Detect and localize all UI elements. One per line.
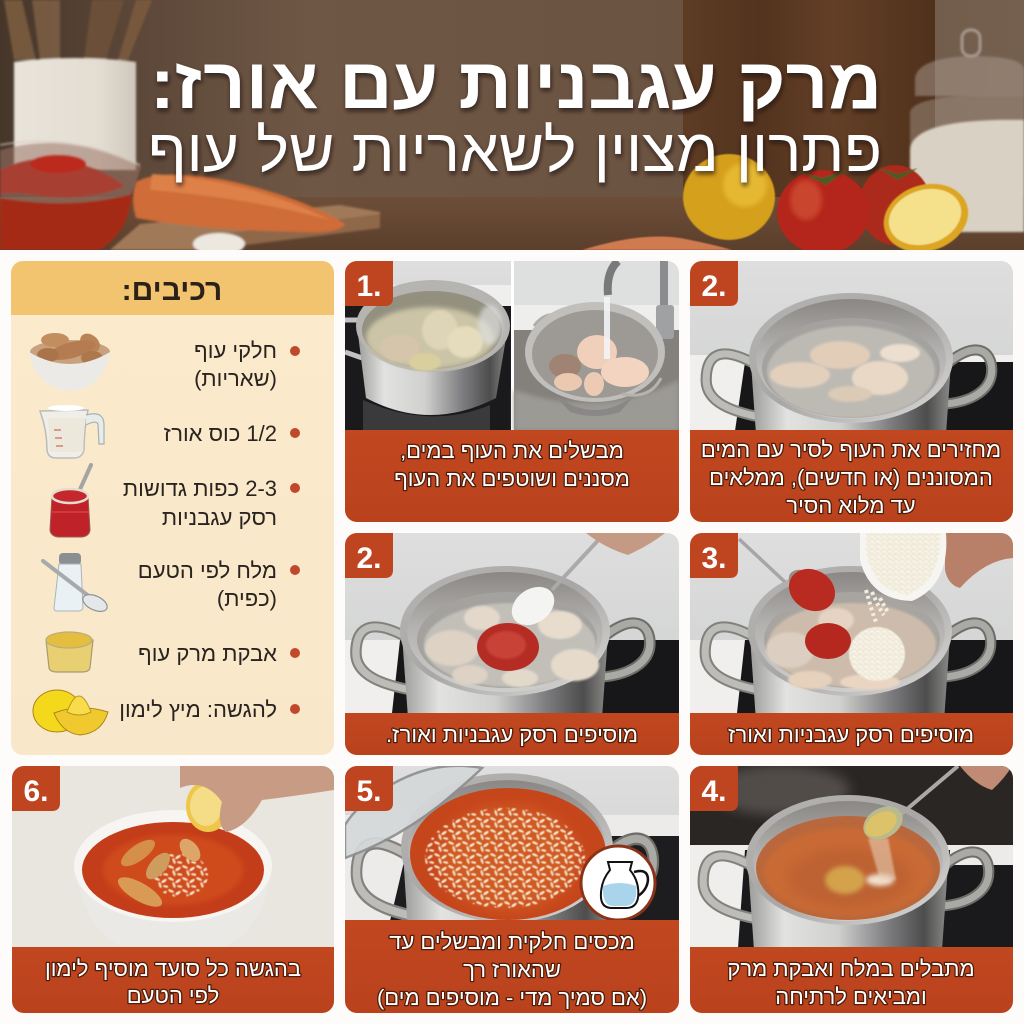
photo: colander in sink	[514, 261, 679, 431]
panel: step 4 season and boil	[690, 765, 1013, 1013]
crock with wooden spoons	[4, 0, 152, 170]
caption	[690, 947, 1013, 1013]
caption: מתבלים במלח ואבקת מרק	[727, 956, 975, 981]
text: rice	[164, 425, 300, 441]
badge: 5	[345, 766, 393, 811]
caption: מוסיפים רסק עגבניות ואורז	[728, 722, 974, 747]
icon: lemon and juicer	[33, 690, 108, 735]
caption: מבשלים את העוף במים,	[400, 438, 624, 463]
ingredients header	[11, 261, 334, 315]
lemon and tomatoes	[582, 153, 969, 250]
panel: step 1 boil and strain	[345, 261, 679, 522]
panel: step 3 add paste and rice	[690, 533, 1013, 755]
photo: pot on hob	[345, 261, 511, 431]
icon: salt shaker and spoon	[43, 553, 110, 615]
caption	[690, 430, 1013, 522]
title line 1: מרק עגבניות עם אורז:	[150, 44, 882, 124]
photo: pot with rice soup and lid	[345, 766, 679, 1020]
badge: 3	[690, 533, 738, 578]
carrots and cutting board	[110, 174, 380, 255]
photo: pot with paste and spoon	[345, 533, 679, 713]
photo: pot with chicken	[690, 261, 1013, 430]
badge: 4: 4.	[701, 775, 727, 808]
badge: 4	[690, 766, 738, 811]
caption: לפי הטעם	[127, 983, 219, 1008]
text: tomato paste: רסק עגבניות	[162, 505, 277, 530]
caption: בהגשה כל סועד מוסיף לימון	[45, 956, 301, 981]
badge: 6: 6.	[23, 775, 49, 808]
icon: chicken bowl	[29, 330, 110, 391]
icon: measuring cup of rice	[40, 405, 104, 458]
text: salt: מלח לפי הטעם	[138, 558, 277, 583]
caption: שהאורז רך	[463, 957, 561, 982]
caption	[345, 430, 679, 522]
panel: step 5 cover and cook	[345, 766, 679, 1020]
badge: 5: 5.	[356, 775, 382, 808]
glass jar of rice	[910, 30, 1024, 232]
caption: מחזירים את העוף לסיר עם המים	[701, 437, 1001, 462]
icon: chicken stock powder	[46, 632, 93, 672]
panel: step 2 return chicken to pot	[690, 261, 1013, 522]
badge: 1: 1.	[356, 270, 382, 303]
header photo banner	[0, 0, 1024, 263]
ingredients heading: רכיבים:	[122, 274, 222, 307]
caption	[690, 713, 1013, 755]
text: tomato paste	[124, 480, 300, 529]
text: chicken parts: חלקי עוף	[194, 338, 277, 363]
panel: ingredients	[11, 261, 334, 755]
panel: step add tomato paste	[345, 533, 679, 755]
badge: 6	[12, 766, 60, 811]
text: salt	[138, 558, 300, 611]
badge: 2: 2.	[356, 542, 382, 575]
panel: step 6 serve	[12, 766, 334, 1013]
badge: 2	[690, 261, 738, 306]
text: tomato paste: 2-3 כפות גדושות	[123, 476, 277, 501]
photo: boiling pot with spoon	[690, 765, 1013, 1010]
caption: מסננים ושוטפים את העוף	[394, 466, 630, 491]
text: lemon: להגשה: מיץ לימון	[119, 697, 277, 722]
text: rice: 1/2 כוס אורז	[164, 421, 277, 446]
caption: מוסיפים רסק עגבניות ואורז.	[386, 722, 638, 747]
text: chicken parts	[194, 338, 300, 391]
caption: עד מלוא הסיר	[786, 493, 916, 518]
glass bowl with tomato paste	[0, 141, 141, 250]
text: stock powder	[139, 648, 300, 665]
caption	[345, 713, 679, 755]
text: chicken parts: (שאריות)	[194, 366, 277, 391]
badge: 2	[345, 533, 393, 578]
photo: soup bowl with lemon	[12, 766, 334, 948]
caption: המסוננים (או חדשים), ממלאים	[709, 465, 993, 490]
caption: ומביאים לרתיחה	[775, 984, 927, 1009]
caption	[12, 947, 334, 1013]
badge: 2: 2.	[701, 270, 727, 303]
text: salt: (כפית)	[217, 586, 277, 611]
icon: water pitcher	[581, 846, 655, 920]
text: stock powder: אבקת מרק עוף	[138, 641, 277, 666]
title line 2: פתרון מצוין לשאריות של עוף	[148, 117, 882, 184]
caption: מכסים חלקית ומבשלים עד	[389, 929, 635, 954]
caption	[345, 920, 679, 1013]
photo: pot with paste and rice	[690, 533, 1013, 713]
caption: (אם סמיך מדי - מוסיפים מים)	[377, 985, 647, 1010]
badge: 1	[345, 261, 393, 306]
title	[148, 44, 882, 184]
icon: tomato paste jar	[50, 465, 91, 537]
badge: 3: 3.	[701, 542, 727, 575]
